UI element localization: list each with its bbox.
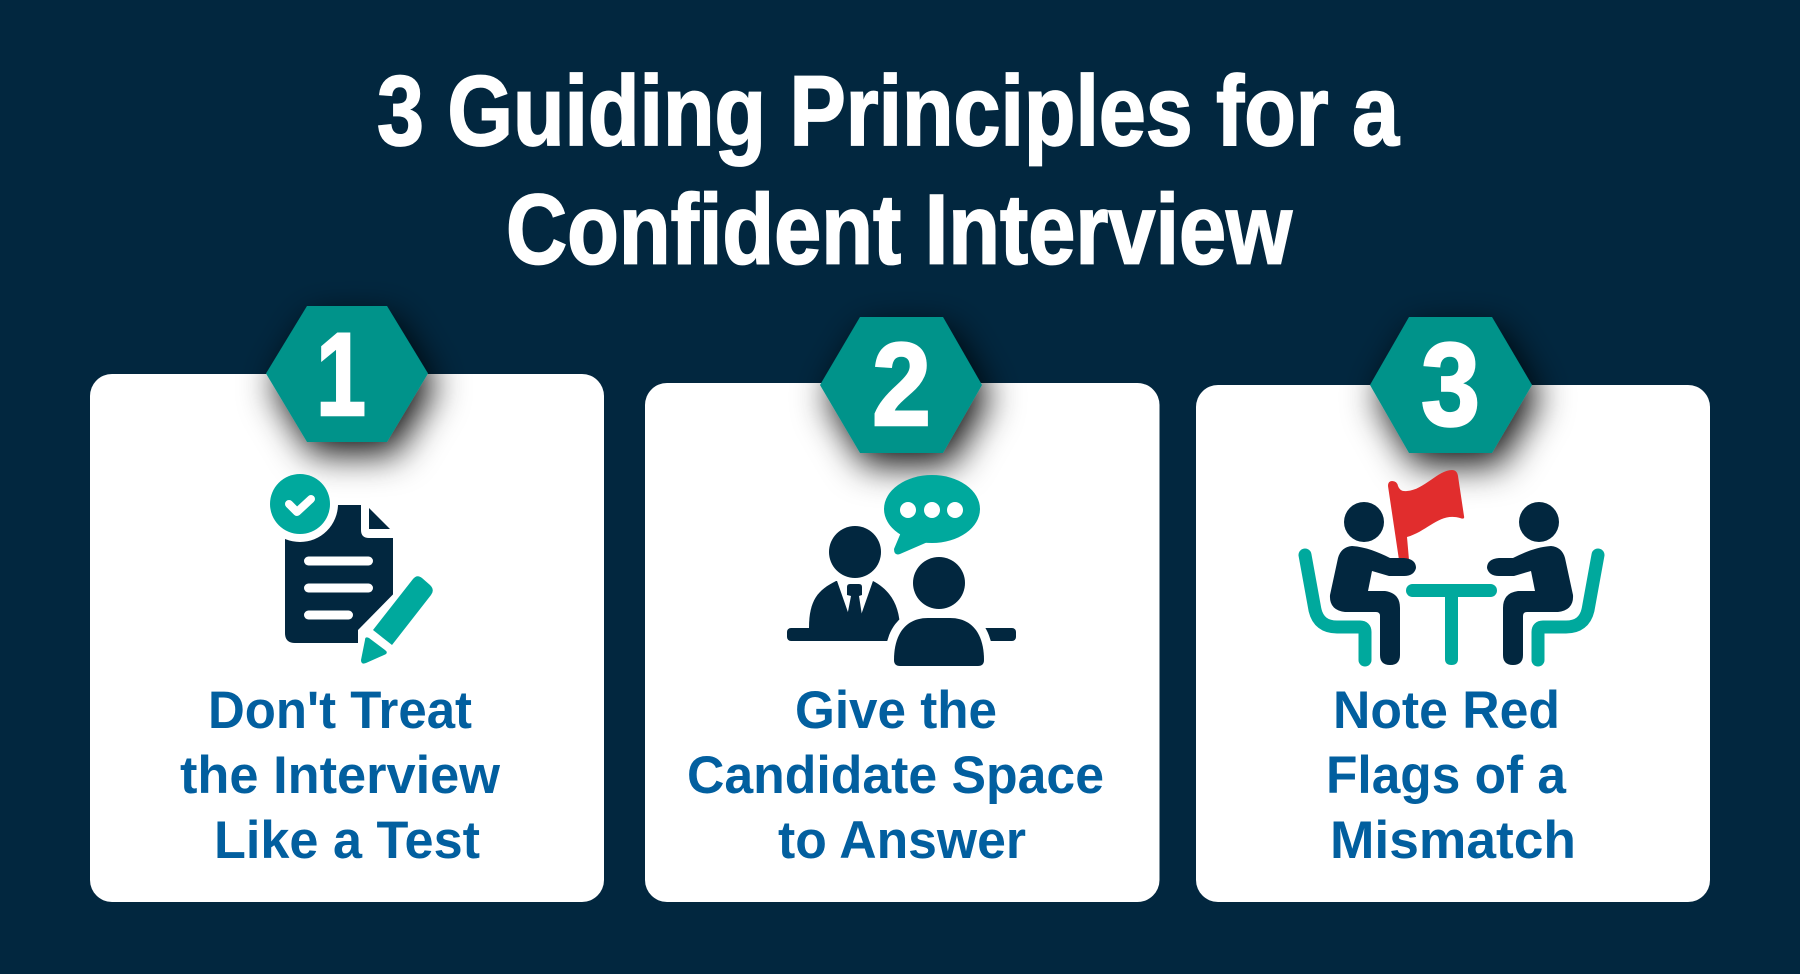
card text 1: the Interview	[180, 746, 501, 805]
card text 2: Give the	[795, 681, 997, 740]
card text 3: Note Red	[1333, 681, 1560, 740]
icon: document with check and pencil	[270, 474, 433, 664]
number badge 1	[266, 306, 428, 442]
panel: principle 2	[645, 317, 1160, 902]
card text 1: Don't Treat	[208, 681, 472, 740]
card text 3: Flags of a	[1326, 746, 1566, 805]
number badge 2	[820, 317, 982, 453]
icon: two people talking	[787, 475, 1016, 666]
number badge 3	[1370, 317, 1532, 453]
card text 1	[180, 681, 501, 870]
icon: two people at table with red flag	[1305, 470, 1598, 665]
title	[377, 55, 1400, 284]
panel: principle 3	[1196, 317, 1710, 902]
card text 2: to Answer	[778, 811, 1026, 870]
card text 2	[687, 681, 1104, 870]
title: Confident Interview	[506, 174, 1293, 284]
panel: principle 1	[90, 306, 604, 902]
number badge 3: 3	[1421, 319, 1480, 451]
card text 3: Mismatch	[1330, 811, 1576, 870]
number badge 1: 1	[316, 309, 366, 441]
number badge 2: 2	[872, 319, 931, 451]
card text 2: Candidate Space	[687, 746, 1104, 805]
card text 1: Like a Test	[214, 811, 480, 870]
card text 3	[1326, 681, 1576, 870]
title: 3 Guiding Principles for a	[377, 55, 1400, 166]
